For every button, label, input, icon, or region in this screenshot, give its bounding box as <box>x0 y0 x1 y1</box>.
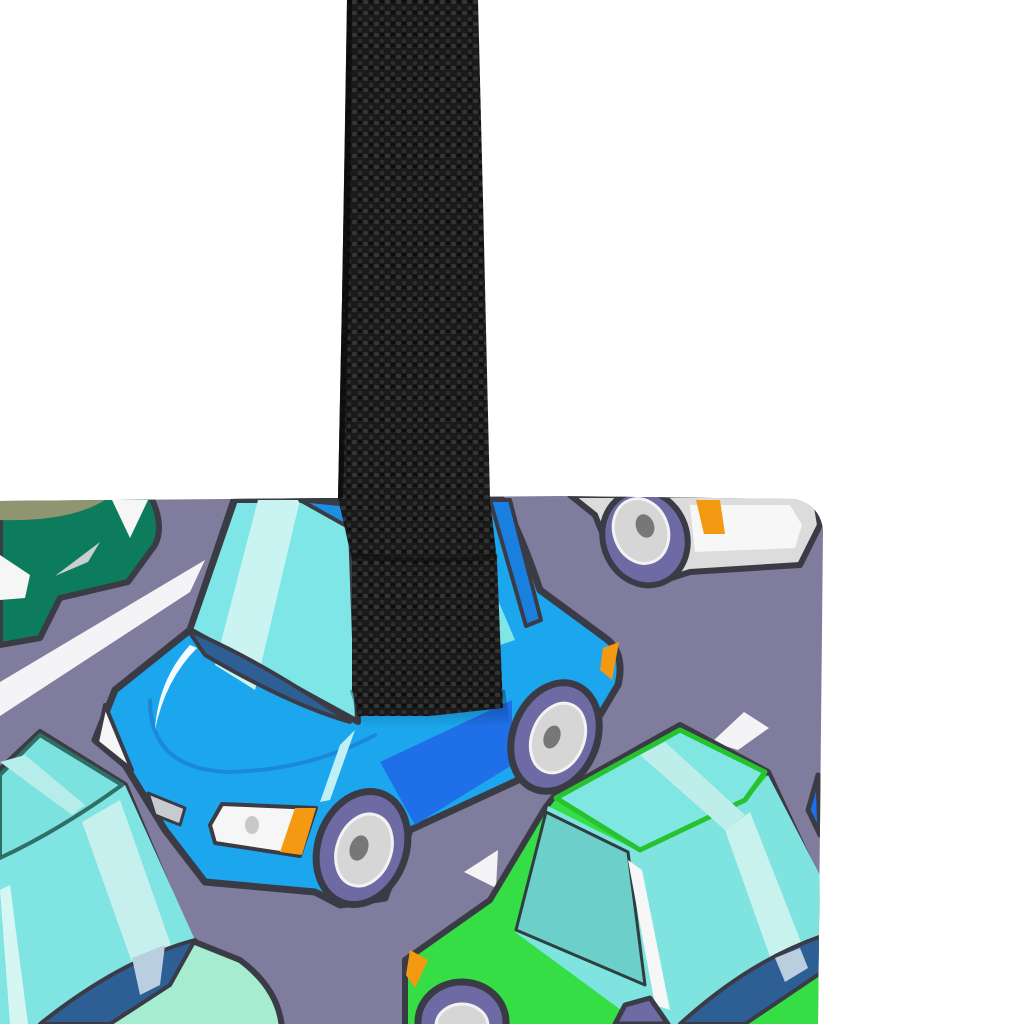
bag body with car pattern <box>0 479 830 1024</box>
lights <box>97 705 132 770</box>
car: blue sliver, right edge <box>808 775 820 835</box>
car: dark green, top left <box>0 495 159 645</box>
windshield <box>190 500 358 722</box>
strap shadow on the bag <box>350 690 510 728</box>
black woven strap <box>338 0 503 716</box>
car: blue, centre <box>95 497 620 918</box>
wheels <box>312 788 412 908</box>
road stripes <box>0 560 769 888</box>
car: mint, bottom left <box>0 732 282 1024</box>
car: white and grey, top right <box>567 496 822 588</box>
car: bright green, bottom right <box>405 725 825 1024</box>
